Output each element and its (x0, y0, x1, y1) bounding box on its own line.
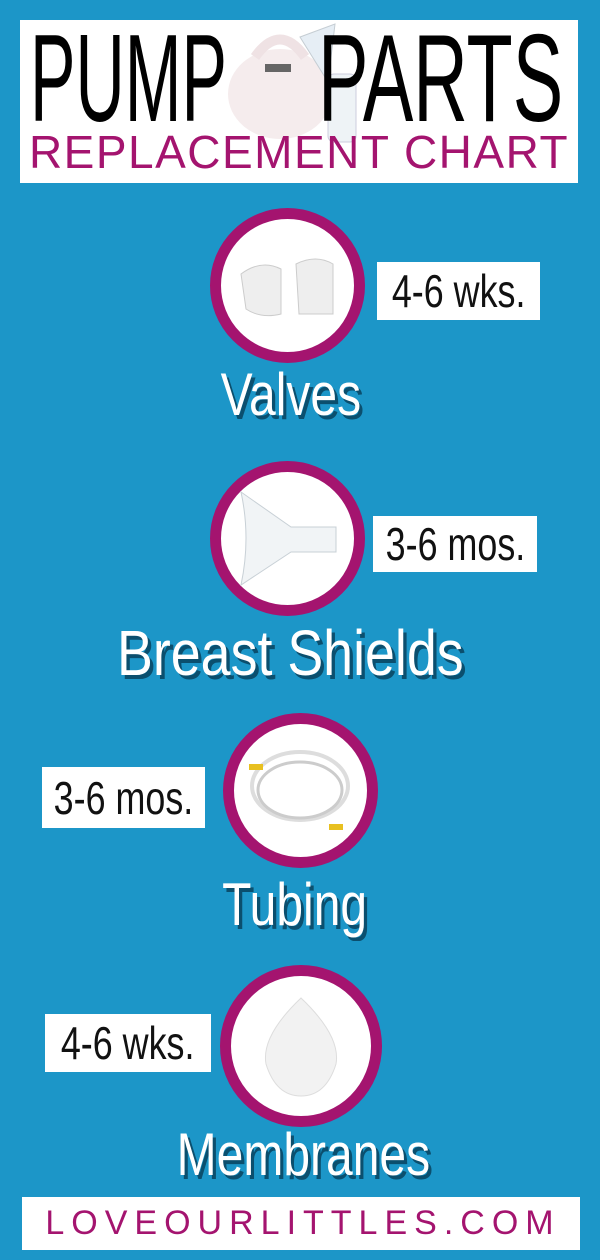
header (20, 20, 578, 183)
title: parts: PARTS (318, 10, 563, 148)
item: valves (210, 208, 540, 428)
time box: 3-6 mos. (385, 518, 525, 570)
item: membranes (45, 965, 432, 1188)
icon: tubing circle (223, 713, 378, 868)
footer (22, 1197, 580, 1250)
time box: 3-6 mos. (54, 772, 193, 824)
icon: breast pump (228, 23, 356, 142)
time box: 4-6 wks. (61, 1017, 195, 1069)
label: Valves (221, 361, 361, 428)
icon: shield circle (210, 461, 365, 616)
label: Tubing (222, 871, 367, 938)
icon: valves circle (210, 208, 365, 363)
footer: LOVEOURLITTLES.COM (45, 1204, 561, 1242)
title: pump: PUMP (30, 10, 227, 148)
time box: 4-6 wks. (392, 265, 525, 317)
item: tubing (42, 713, 378, 941)
icon: membrane circle (220, 965, 382, 1127)
label: Breast Shields (117, 617, 463, 689)
item: breast shields (117, 461, 537, 689)
label: Membranes (176, 1121, 430, 1188)
subtitle: REPLACEMENT CHART (29, 126, 569, 178)
